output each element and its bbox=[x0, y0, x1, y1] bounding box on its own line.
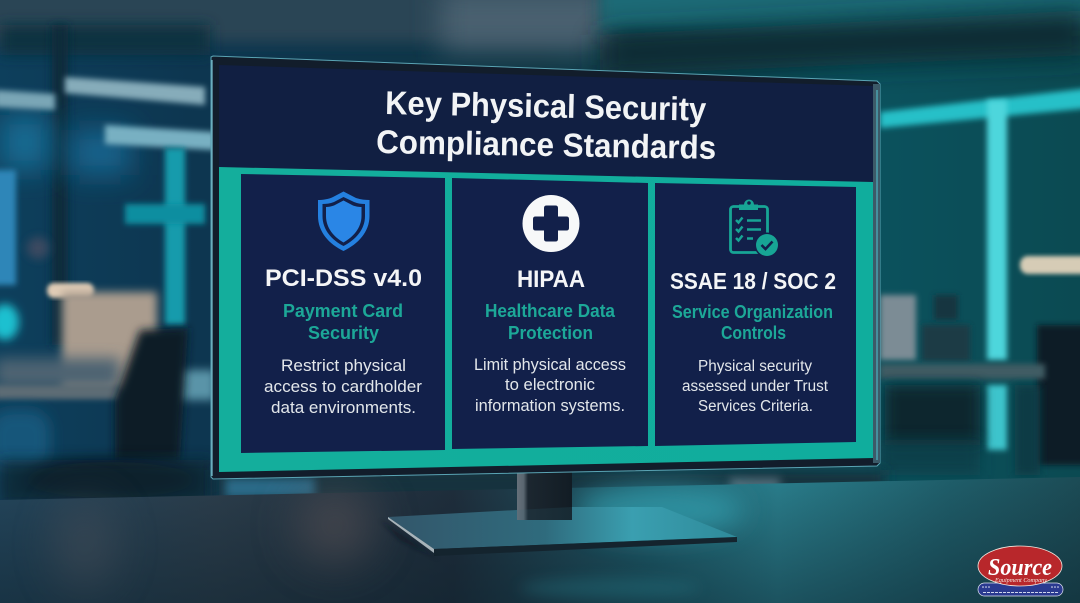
description: HIPAA: Limit physical access bbox=[474, 356, 626, 374]
title bbox=[376, 84, 716, 166]
title: Key Physical Security bbox=[385, 84, 707, 128]
panel: HIPAA bbox=[452, 178, 648, 449]
title: Compliance Standards bbox=[376, 123, 716, 166]
description: SSAE 18 / SOC 2: assessed under Trust bbox=[682, 378, 829, 395]
description: SSAE 18 / SOC 2: Physical security bbox=[698, 358, 812, 375]
subheading: Payment Card Security: Payment Card bbox=[283, 301, 403, 321]
description: SSAE 18 / SOC 2 bbox=[682, 358, 829, 415]
subheading: Payment Card Security: Security bbox=[308, 323, 379, 343]
subheading: Payment Card Security bbox=[283, 301, 403, 343]
description: SSAE 18 / SOC 2: Services Criteria. bbox=[698, 398, 813, 415]
subheading: Healthcare Data Protection: Healthcare Data bbox=[485, 301, 616, 321]
description: PCI-DSS: Restrict physical bbox=[281, 357, 406, 375]
panel: SSAE 18 / SOC 2 bbox=[655, 183, 856, 446]
heading: PCI-DSS v4.0: PCI-DSS v4.0 bbox=[265, 265, 422, 292]
heading: HIPAA: HIPAA bbox=[517, 266, 585, 293]
subheading: Service Organization Controls: Service Organization bbox=[672, 302, 833, 322]
logo: Source Equipment Company: Equipment Company bbox=[994, 577, 1047, 584]
description: HIPAA bbox=[474, 356, 626, 415]
monitor stand bbox=[380, 462, 737, 560]
icon: shield bbox=[318, 192, 370, 251]
description: PCI-DSS: access to cardholder bbox=[264, 378, 423, 396]
description: HIPAA: to electronic bbox=[505, 376, 595, 394]
description: PCI-DSS bbox=[264, 357, 423, 417]
description: PCI-DSS: data environments. bbox=[271, 399, 416, 417]
logo: Source Equipment Company bbox=[978, 546, 1063, 596]
subheading: Healthcare Data Protection: Protection bbox=[508, 323, 593, 343]
description: HIPAA: information systems. bbox=[475, 397, 625, 415]
screen: navy header background bbox=[219, 65, 873, 182]
icon: clipboard with check bbox=[730, 200, 780, 258]
icon: medical cross bbox=[522, 195, 580, 252]
subheading: Healthcare Data Protection bbox=[485, 301, 616, 343]
desk surface bbox=[0, 477, 1080, 603]
screen: teal frame bbox=[219, 167, 873, 472]
logo: Source Equipment Company: Source bbox=[988, 555, 1052, 581]
subheading: Service Organization Controls: Controls bbox=[721, 323, 786, 343]
heading: SSAE 18 / SOC 2: SSAE 18 / SOC 2 bbox=[670, 268, 836, 294]
monitor bezel bbox=[211, 56, 880, 479]
subheading: Service Organization Controls bbox=[672, 302, 833, 343]
panel: PCI-DSS v4.0 bbox=[241, 174, 445, 453]
